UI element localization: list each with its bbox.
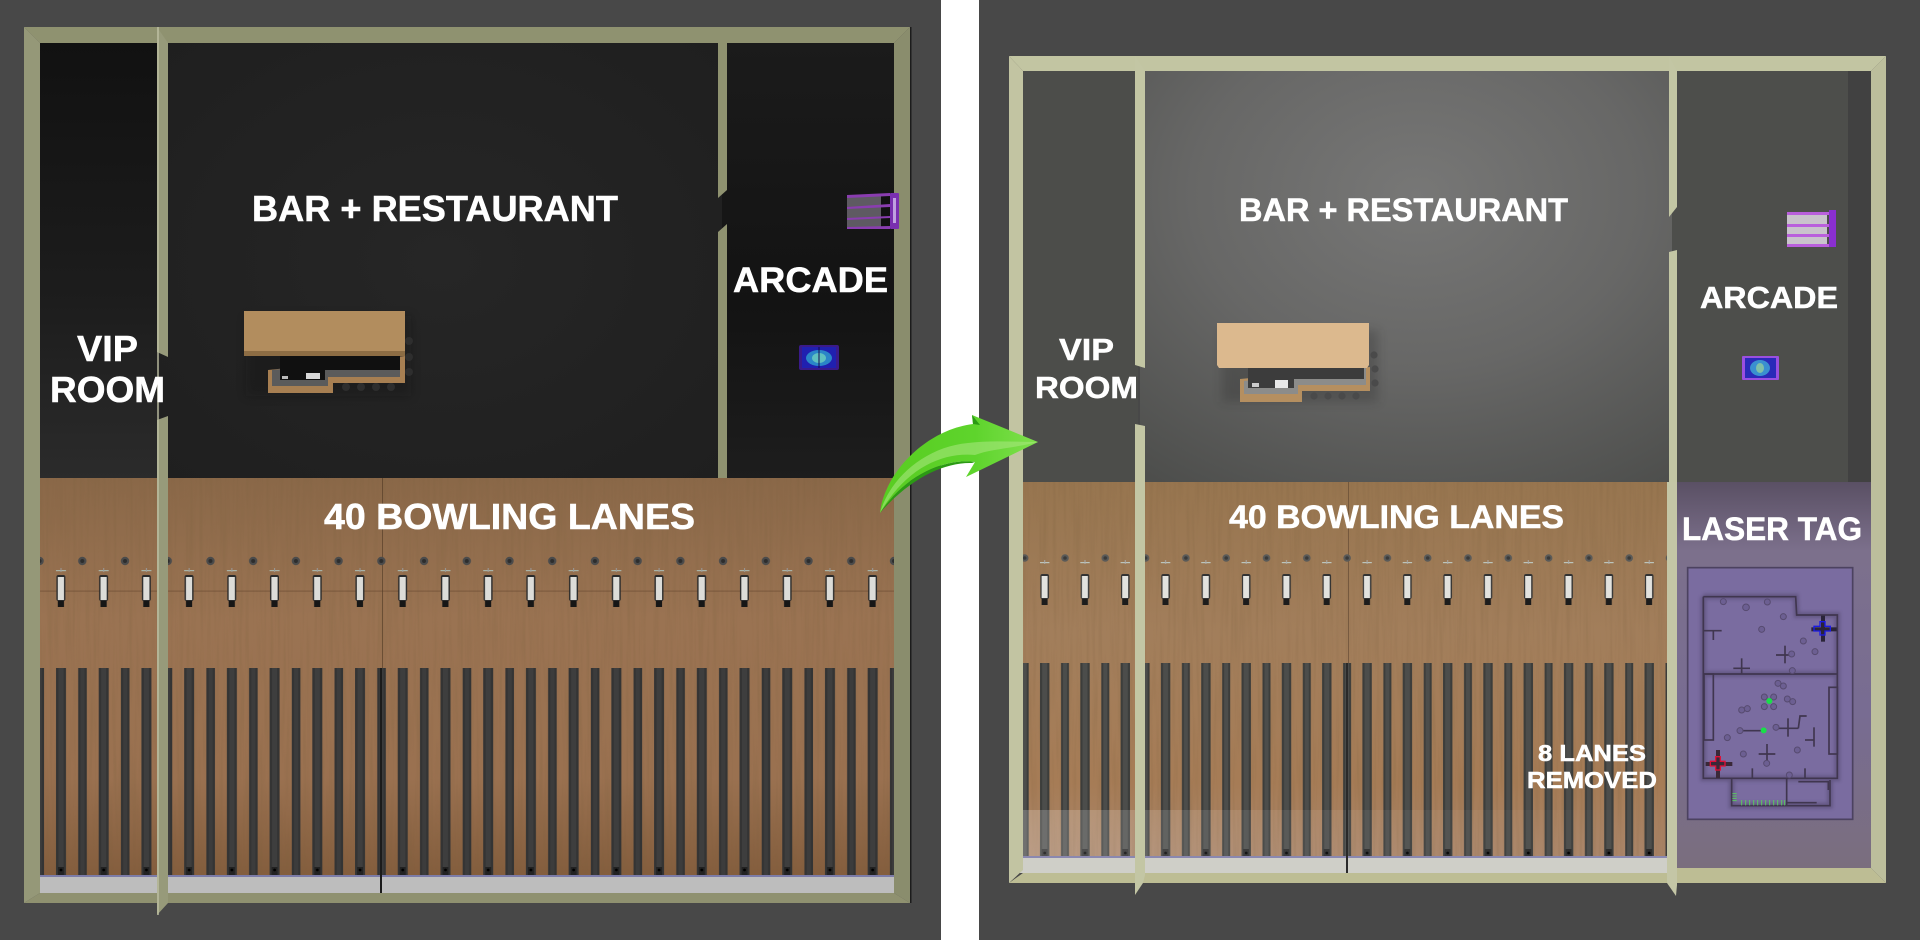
label: bar and restaurant: BAR + RESTAURANT	[1239, 192, 1568, 228]
label: room: ROOM	[50, 369, 165, 410]
arcade machine: air hockey table	[1742, 356, 1779, 380]
room floor: bar and restaurant	[1140, 71, 1672, 483]
laser tag room	[1677, 482, 1871, 868]
interior wall: VIP room	[1135, 56, 1145, 895]
arcade machine: purple racks	[847, 193, 899, 229]
arcade machine: purple racks	[1787, 210, 1836, 247]
label: 8 lanes removed: REMOVED	[1527, 767, 1657, 793]
label: laser tag: LASER TAG	[1682, 511, 1862, 547]
label: 8 lanes removed	[1527, 740, 1657, 793]
pin deck strip	[36, 668, 894, 895]
base marker: blue team	[1811, 616, 1837, 642]
room floor: bar and restaurant	[160, 43, 722, 479]
green dashes	[1732, 794, 1785, 805]
interior wall: arcade	[718, 27, 727, 478]
room floor: VIP room	[40, 43, 160, 479]
arrow: before to after	[880, 415, 1038, 513]
label: 8 lanes removed: 8 LANES	[1538, 740, 1646, 766]
panel: revised floor plan	[1009, 56, 1886, 896]
base marker: red team	[1706, 750, 1732, 778]
bar counter	[1217, 323, 1379, 402]
label: room: ROOM	[1035, 370, 1138, 405]
bowling lanes, ball returns and seating	[1023, 482, 1668, 858]
bar counter	[244, 311, 413, 396]
label: bar and restaurant: BAR + RESTAURANT	[252, 188, 618, 229]
bowling area wood floor	[40, 478, 894, 878]
bowling lanes, ball returns and seating	[40, 478, 894, 878]
interior wall: laser tag	[1667, 482, 1677, 896]
room floor: VIP room	[1023, 71, 1138, 483]
room floor: arcade	[1672, 71, 1848, 483]
label: 40 bowling lanes: 40 BOWLING LANES	[1229, 499, 1564, 535]
outer walls	[1009, 56, 1886, 883]
outer walls	[24, 27, 912, 903]
bowling area wood floor	[1023, 482, 1668, 858]
pin deck strip	[1020, 663, 1668, 875]
label: VIP: VIP	[77, 328, 138, 369]
arcade machine: air hockey table	[799, 345, 839, 370]
label: arcade: ARCADE	[1700, 280, 1838, 315]
label: 40 bowling lanes: 40 BOWLING LANES	[324, 496, 695, 537]
faint haze on lower lanes	[1023, 810, 1668, 857]
green markers	[1761, 698, 1772, 733]
panel: original floor plan	[24, 27, 912, 915]
interior wall: arcade	[1669, 56, 1677, 482]
room floor: arcade	[722, 43, 894, 479]
label: VIP: VIP	[1059, 332, 1114, 367]
dark strip beside arcade	[1848, 71, 1871, 483]
white divider	[941, 0, 979, 940]
laser tag arena plan	[1688, 568, 1853, 819]
label: arcade: ARCADE	[733, 261, 888, 300]
interior wall: VIP room	[157, 27, 168, 915]
